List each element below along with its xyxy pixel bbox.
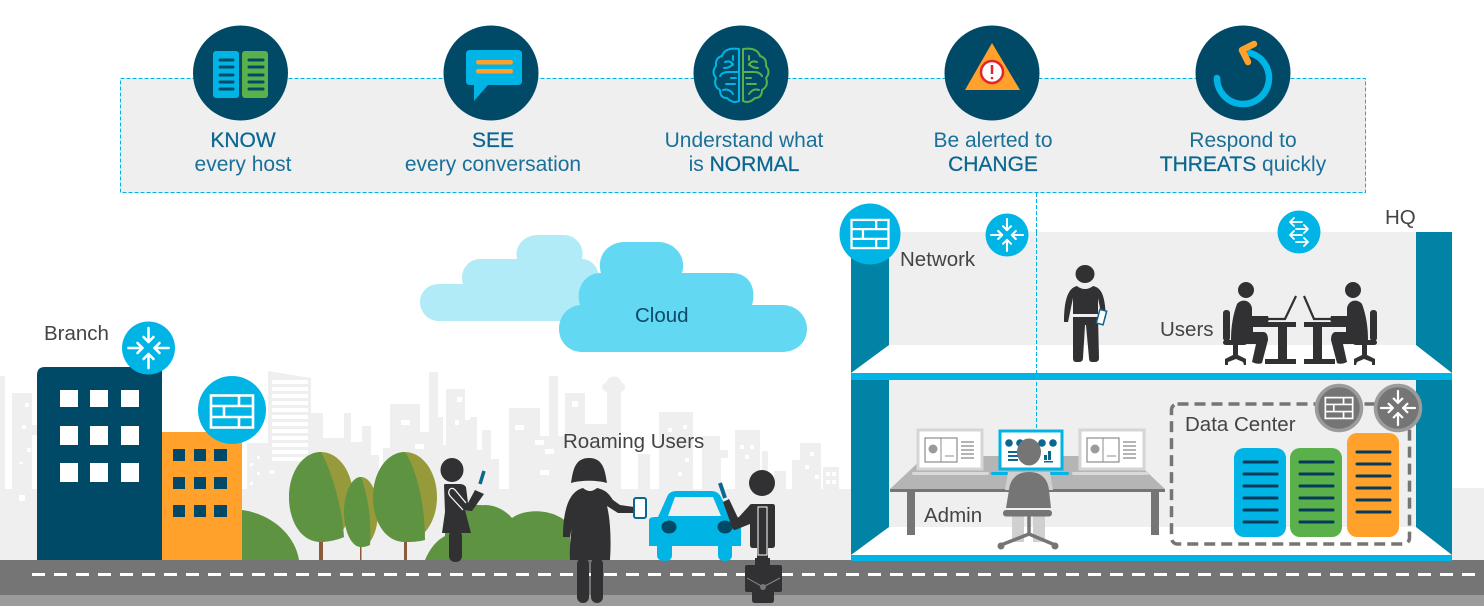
text: see every conversation: SEE bbox=[472, 129, 514, 152]
icon: branch firewall bbox=[198, 376, 266, 444]
icon: data center router bbox=[1376, 386, 1420, 430]
text: see every conversation: every conversation bbox=[405, 153, 581, 176]
text: be alerted to change: Be alerted to bbox=[933, 129, 1053, 152]
icon: branch router bbox=[122, 322, 175, 374]
icon: car bbox=[649, 491, 741, 561]
text: be alerted to change bbox=[933, 129, 1053, 176]
label: data center: Data Center bbox=[1185, 413, 1296, 436]
text: be alerted to change: CHANGE bbox=[948, 153, 1038, 176]
laptop: centre bbox=[991, 431, 1069, 475]
panel: capability band bbox=[120, 78, 1366, 192]
building: branch bbox=[37, 367, 162, 560]
text: understand what is normal: is NORMAL bbox=[689, 153, 799, 176]
text: know every host bbox=[195, 129, 292, 176]
icon: understand, brain bbox=[694, 26, 788, 120]
icon: alert triangle bbox=[944, 26, 1040, 120]
link: admin dashed bbox=[1036, 232, 1038, 430]
person: woman with phone bbox=[440, 458, 484, 562]
building: HQ upper floor bbox=[851, 232, 1452, 380]
server: blue bbox=[1234, 448, 1286, 537]
laptop: right bbox=[1072, 430, 1149, 475]
building: branch annex bbox=[162, 432, 242, 560]
icon: HQ switch bbox=[1278, 210, 1320, 254]
icon: HQ firewall bbox=[840, 204, 900, 264]
people: users at desks bbox=[1223, 282, 1377, 365]
person: standing user bbox=[1064, 265, 1107, 362]
icon: data center firewall bbox=[1316, 386, 1362, 430]
label: HQ: HQ bbox=[1385, 206, 1416, 229]
label: roaming users: Roaming Users bbox=[563, 430, 704, 453]
person: roaming woman bbox=[563, 458, 646, 603]
text: know every host: every host bbox=[195, 153, 292, 176]
person: admin bbox=[998, 438, 1058, 550]
label: cloud: Cloud bbox=[635, 304, 689, 327]
background city skyline bbox=[0, 371, 1484, 560]
data center dashed boundary bbox=[1172, 404, 1410, 544]
trees and bushes bbox=[242, 452, 570, 560]
server: green bbox=[1290, 448, 1342, 537]
label: admin: Admin bbox=[924, 504, 982, 527]
text: understand what is normal: Understand what bbox=[665, 129, 824, 152]
icon: know, hosts bbox=[193, 26, 288, 120]
label: users: Users bbox=[1160, 318, 1214, 341]
icon: see, conversation bbox=[444, 26, 538, 120]
label: network: Network bbox=[900, 248, 976, 271]
text: respond to threats quickly: THREATS quickly bbox=[1160, 153, 1327, 176]
building: HQ lower floor bbox=[851, 380, 1452, 561]
person: man with briefcase bbox=[720, 470, 782, 603]
clouds bbox=[420, 235, 807, 352]
server: orange bbox=[1347, 433, 1399, 537]
dashed link to admin bbox=[1036, 193, 1038, 430]
label: branch: Branch bbox=[44, 322, 109, 345]
laptop: left bbox=[912, 430, 989, 475]
road bbox=[0, 560, 1484, 606]
text: see every conversation bbox=[405, 129, 581, 176]
icon: HQ router bbox=[986, 214, 1028, 256]
text: know every host: KNOW bbox=[210, 129, 276, 152]
text: understand what is normal bbox=[665, 129, 824, 176]
text: respond to threats quickly bbox=[1160, 129, 1327, 176]
icon: respond, loop arrow bbox=[1196, 26, 1290, 120]
text: respond to threats quickly: Respond to bbox=[1189, 129, 1297, 152]
admin desk bbox=[890, 456, 1165, 535]
